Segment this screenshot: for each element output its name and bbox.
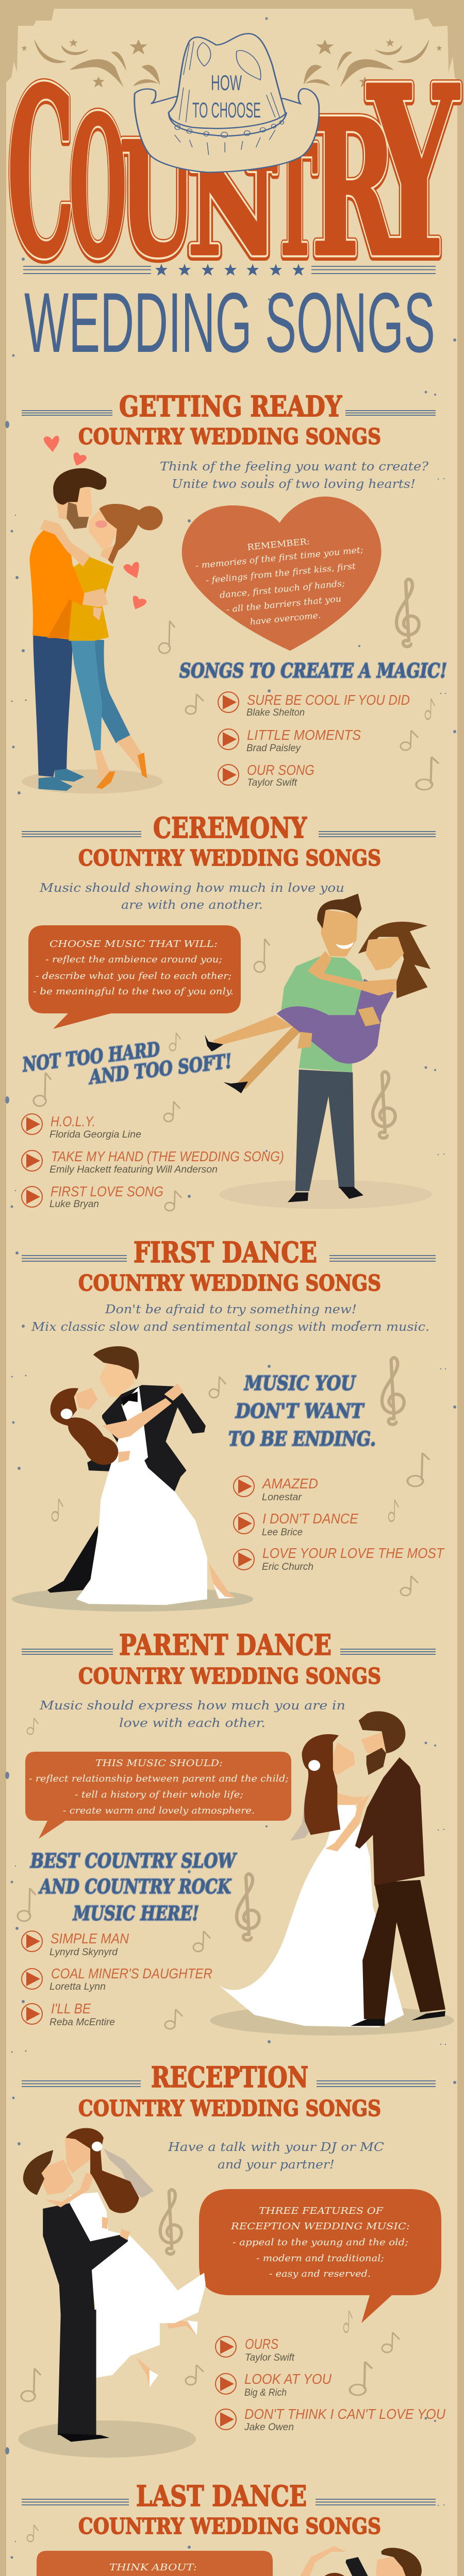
illustration: groom carrying bride — [205, 893, 432, 1209]
COUNTRY lettering: U — [120, 108, 195, 290]
song: Little Moments: Brad Paisley — [246, 743, 301, 754]
song: Little Moments: LITTLE MOMENTS — [247, 727, 361, 743]
song: Ours: Taylor Swift — [245, 2352, 295, 2363]
callout bubble: - tell a history of their whole life; — [75, 1789, 243, 1800]
illustration: kissing couple — [22, 436, 163, 793]
COUNTRY lettering: C — [7, 38, 74, 308]
subheading: NOT TOO HARD — [21, 1037, 161, 1076]
subheading: TO BE ENDING. — [228, 1427, 376, 1450]
callout bubble: - appeal to the young and the old; — [233, 2237, 408, 2248]
song: Ours: OURS — [245, 2336, 278, 2352]
illustration: dancing couple — [12, 1346, 253, 1612]
heading — [22, 2060, 436, 2122]
intro text: and your partner! — [218, 2158, 335, 2172]
intro text — [39, 882, 344, 912]
song: Our Song — [218, 762, 314, 788]
song: H.O.L.Y. — [22, 1113, 141, 1140]
COUNTRY lettering: O — [69, 75, 127, 298]
heading — [22, 2479, 436, 2539]
song: First Love Song — [22, 1183, 163, 1210]
music notes — [18, 1718, 259, 2029]
COUNTRY lettering: T — [272, 114, 318, 289]
song: Sure Be Cool If You Did: SURE BE COOL IF YOU DID — [247, 692, 410, 708]
song: Simple Man: SIMPLE MAN — [51, 1930, 129, 1946]
music notes — [159, 579, 439, 790]
intro text: Think of the feeling you want to create? — [160, 460, 429, 473]
heading: COUNTRY WEDDING SONGS — [78, 845, 381, 871]
song: Our Song: Taylor Swift — [247, 777, 297, 788]
intro text: love with each other. — [119, 1717, 266, 1730]
music notes — [52, 1358, 429, 1596]
intro text — [31, 1303, 429, 1334]
heading: CEREMONY — [153, 811, 307, 844]
COUNTRY lettering: O — [69, 76, 127, 299]
COUNTRY lettering: C — [7, 38, 74, 308]
intro text — [39, 1699, 345, 1730]
section: first dance — [12, 1235, 445, 1612]
heading: COUNTRY WEDDING SONGS — [78, 2514, 381, 2539]
intro text: Music should showing how much in love you — [39, 882, 344, 895]
COUNTRY lettering: T — [272, 114, 318, 289]
COUNTRY lettering: O — [69, 75, 127, 298]
song: Look at You — [216, 2371, 332, 2398]
heading: COUNTRY WEDDING SONGS — [78, 1664, 381, 1689]
hat text: HOW — [211, 71, 242, 95]
cowboy hat — [135, 33, 319, 172]
callout bubble — [28, 925, 241, 1029]
COUNTRY lettering: R — [311, 80, 398, 298]
callout bubble: THIS MUSIC SHOULD: — [95, 1758, 223, 1769]
intro text: Unite two souls of two loving hearts! — [172, 478, 416, 491]
COUNTRY lettering: N — [188, 137, 278, 284]
callout bubble: - reflect relationship between parent and the child; — [29, 1773, 289, 1784]
callout bubble: - modern and traditional; — [256, 2253, 384, 2264]
music notes — [18, 2525, 263, 2576]
heading: PARENT DANCE — [119, 1628, 332, 1662]
intro text: Don't be afraid to try something new! — [105, 1303, 357, 1316]
COUNTRY lettering: N — [188, 135, 278, 283]
song: I'll Be — [22, 2001, 115, 2028]
subheading — [21, 1029, 233, 1096]
callout bubble: - easy and reserved. — [269, 2268, 371, 2279]
COUNTRY lettering: T — [272, 115, 318, 290]
song: Don't Think I Can't Love You — [216, 2406, 446, 2433]
song: Coal Miner's Daughter: COAL MINER'S DAUGHTER — [51, 1965, 212, 1981]
song: Simple Man — [22, 1930, 129, 1958]
callout bubble: - create warm and lovely atmosphere. — [63, 1805, 255, 1816]
music notes — [34, 939, 395, 1211]
intro text: Mix classic slow and sentimental songs with modern music. — [31, 1320, 429, 1334]
heading: FIRST DANCE — [134, 1235, 317, 1269]
section: last dance — [18, 2479, 454, 2576]
song: I Don't Dance: Lee Brice — [262, 1527, 303, 1538]
heading — [22, 1628, 436, 1689]
heading — [22, 811, 436, 871]
intro text — [168, 2141, 384, 2172]
callout bubble: RECEPTION WEDDING MUSIC: — [230, 2221, 410, 2232]
callout bubble: THREE FEATURES OF — [259, 2206, 384, 2216]
hat text — [192, 71, 261, 122]
COUNTRY lettering: U — [120, 108, 195, 290]
song: I'll Be: Reba McEntire — [49, 2017, 115, 2028]
song: H.O.L.Y.: Florida Georgia Line — [49, 1129, 141, 1140]
callout bubble — [199, 2189, 441, 2323]
subheading: AND COUNTRY ROCK — [39, 1875, 232, 1898]
star divider — [23, 264, 436, 276]
song: Take My Hand: TAKE MY HAND (THE WEDDING SONG) — [51, 1148, 284, 1164]
COUNTRY lettering: U — [120, 109, 195, 291]
intro text — [160, 460, 429, 491]
callout bubble: THINK ABOUT: — [109, 2562, 197, 2573]
song: Coal Miner's Daughter — [22, 1965, 212, 1992]
illustration: twirling couple — [210, 2546, 454, 2576]
callout bubble: - describe what you feel to each other; — [36, 971, 231, 981]
callout: heart: - feelings from the first kiss, first — [205, 561, 356, 585]
song: H.O.L.Y.: H.O.L.Y. — [51, 1113, 95, 1129]
song: I Don't Dance: I DON'T DANCE — [262, 1511, 358, 1527]
song: Our Song: OUR SONG — [247, 762, 314, 778]
song: Don't Think I Can't Love You: Jake Owen — [244, 2422, 294, 2433]
subheading — [228, 1371, 376, 1450]
song: I Don't Dance — [234, 1511, 358, 1538]
callout bubble: - reflect the ambience around you; — [45, 954, 222, 965]
callout bubble — [37, 2551, 273, 2576]
subheading: AND TOO SOFT! — [87, 1049, 233, 1089]
subheading: MUSIC HERE! — [72, 1902, 199, 1925]
heading: RECEPTION — [151, 2060, 308, 2094]
song: Ours — [216, 2336, 295, 2363]
callout: heart: REMEMBER: — [247, 536, 310, 552]
callout: heart: dance, first touch of hands; — [219, 578, 345, 600]
song: Love Your Love the Most: LOVE YOUR LOVE THE MOST — [262, 1545, 445, 1561]
heading: COUNTRY WEDDING SONGS — [78, 2096, 381, 2122]
COUNTRY lettering: R — [311, 79, 398, 297]
song: Amazed: AMAZED — [261, 1476, 318, 1492]
section: ceremony — [21, 811, 436, 1211]
song: Little Moments — [218, 727, 361, 754]
song: Look at You: Big & Rich — [244, 2387, 287, 2398]
section: parent dance — [18, 1628, 454, 2036]
illustration: groom lifting bride — [19, 2128, 206, 2458]
callout bubble: CHOOSE MUSIC THAT WILL: — [49, 939, 218, 950]
song: Love Your Love the Most — [234, 1545, 445, 1572]
callout: heart — [182, 497, 382, 651]
subheading: BEST COUNTRY SLOW — [30, 1849, 237, 1872]
COUNTRY lettering — [7, 36, 461, 310]
intro text: Have a talk with your DJ or MC — [168, 2141, 384, 2154]
song: Sure Be Cool If You Did — [218, 692, 410, 718]
song: Amazed — [234, 1476, 318, 1503]
song: Look at You: LOOK AT YOU — [244, 2371, 332, 2387]
song: Sure Be Cool If You Did: Blake Shelton — [246, 707, 305, 718]
heading — [22, 1235, 436, 1296]
song: Don't Think I Can't Love You: DON'T THINK I CAN'T LOVE YOU — [244, 2406, 446, 2422]
song: Simple Man: Lynyrd Skynyrd — [49, 1947, 118, 1958]
song: Love Your Love the Most: Eric Church — [262, 1562, 313, 1572]
COUNTRY lettering: C — [7, 39, 74, 309]
hat text: TO CHOOSE — [192, 98, 261, 122]
heading: COUNTRY WEDDING SONGS — [78, 424, 381, 450]
intro text: Music should express how much you are in — [39, 1699, 345, 1713]
song: Coal Miner's Daughter: Loretta Lynn — [49, 1981, 106, 1992]
song: First Love Song: Luke Bryan — [49, 1199, 99, 1210]
heading: GETTING READY — [119, 389, 342, 423]
heading: LAST DANCE — [136, 2479, 307, 2513]
subheading — [30, 1849, 237, 1925]
COUNTRY lettering: N — [188, 135, 278, 283]
ornaments — [21, 39, 442, 88]
subheading: MUSIC YOU — [243, 1371, 356, 1395]
heading: COUNTRY WEDDING SONGS — [78, 1270, 381, 1296]
section: getting ready — [22, 389, 447, 793]
intro text: are with one another. — [121, 899, 263, 912]
song: Take My Hand — [22, 1148, 284, 1175]
heading — [22, 389, 436, 450]
song: I'll Be: I'LL BE — [51, 2001, 91, 2016]
COUNTRY lettering: R — [311, 79, 398, 297]
callout bubble — [25, 1752, 291, 1839]
song: First Love Song: FIRST LOVE SONG — [51, 1183, 163, 1199]
callout: heart: - all the barriers that you — [226, 594, 342, 615]
subheading: DON'T WANT — [235, 1399, 364, 1422]
section: reception — [19, 2060, 446, 2458]
song: Amazed: Lonestar — [262, 1492, 302, 1503]
callout: heart: - memories of the first time you met; — [195, 545, 364, 571]
title block — [7, 33, 461, 370]
callout: heart: have overcome. — [250, 610, 321, 627]
callout bubble: - be meaningful to the two of you only. — [33, 986, 234, 997]
music notes — [21, 2190, 400, 2401]
illustration: bearded groom with bride — [210, 1711, 454, 2036]
song: Take My Hand: Emily Hackett featuring Will Anderson — [49, 1164, 218, 1175]
